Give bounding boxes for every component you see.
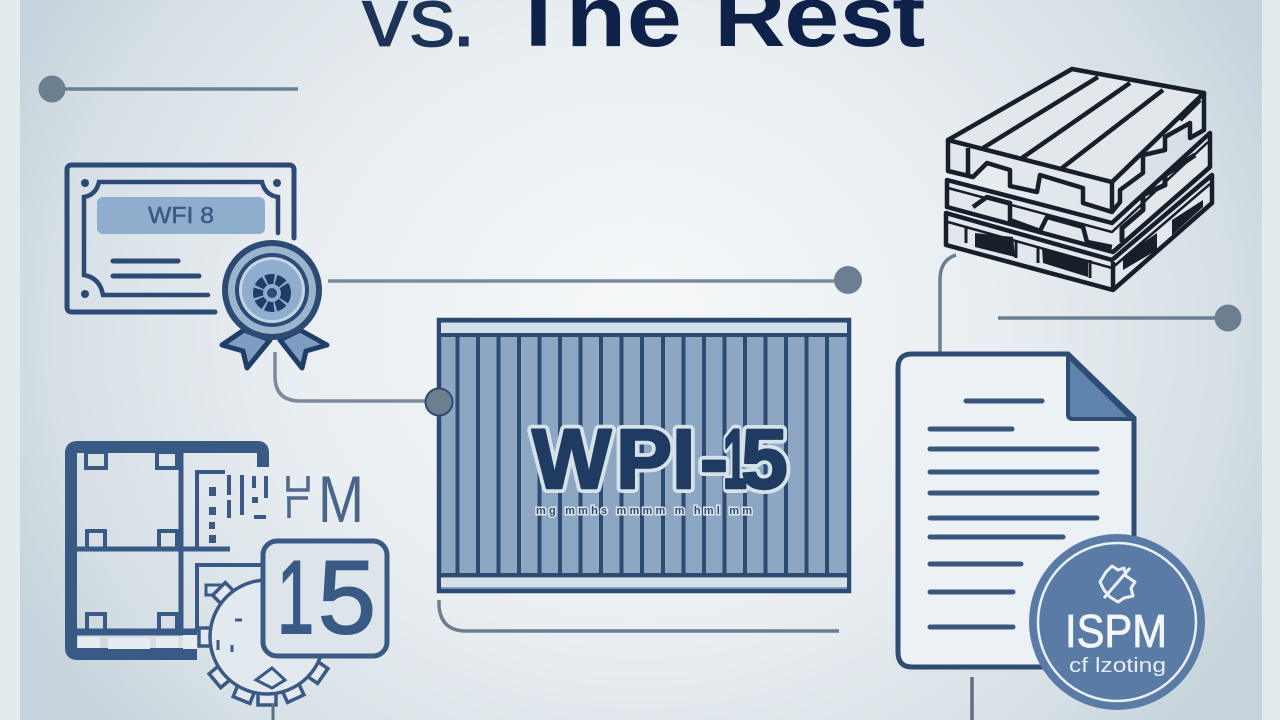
connector dot: container <box>426 388 452 416</box>
icon: stacked pallets <box>946 69 1212 290</box>
icon: document with ISPM badge <box>898 354 1205 710</box>
badge 15: 1 <box>277 540 314 656</box>
pallet slots <box>78 635 197 649</box>
container label: WPI- <box>532 412 728 506</box>
document fold <box>1068 356 1132 419</box>
garbled label <box>287 476 308 518</box>
connector: pallets to document <box>940 255 956 352</box>
connector: under container <box>439 600 839 631</box>
icon: certificate: WFI 8 <box>148 202 214 228</box>
icon: seal with ribbons <box>222 240 327 368</box>
icon: crossed bug <box>1100 566 1135 602</box>
ISPM badge: ISPM <box>1065 605 1167 657</box>
ISPM badge <box>1029 534 1205 710</box>
middle pallet <box>947 133 1210 252</box>
document sheet <box>898 354 1134 667</box>
icon: pallet blueprint with 15 badge <box>71 447 387 720</box>
container rails <box>439 335 849 575</box>
document text lines <box>930 401 1097 627</box>
gear <box>199 580 328 720</box>
container label: WPI- <box>532 412 728 506</box>
connector: right dot <box>998 304 1242 332</box>
container label: 5 <box>741 412 788 506</box>
connector: top left <box>38 76 298 102</box>
M label: M <box>318 462 364 536</box>
garbled blocks <box>209 475 268 543</box>
top pallet <box>948 69 1204 212</box>
ISPM badge: cf lzoting <box>1069 655 1166 677</box>
badge 15: 5 <box>318 540 376 656</box>
container slats <box>458 336 827 575</box>
bottom pallet <box>946 175 1212 290</box>
container WPI-15 <box>439 320 849 591</box>
container label: 1 <box>723 412 747 506</box>
pallet frame <box>71 447 263 654</box>
container label: 1 <box>723 412 747 506</box>
connector: seal to container <box>275 352 430 401</box>
container sublabel: mg mmhs mmmm m hml mm <box>536 505 752 517</box>
connector: document bottom <box>970 677 974 720</box>
icon: certificate <box>67 165 327 368</box>
container label: 5 <box>741 412 788 506</box>
badge 15 <box>263 540 387 656</box>
connector: certificate to right dot <box>328 266 862 294</box>
